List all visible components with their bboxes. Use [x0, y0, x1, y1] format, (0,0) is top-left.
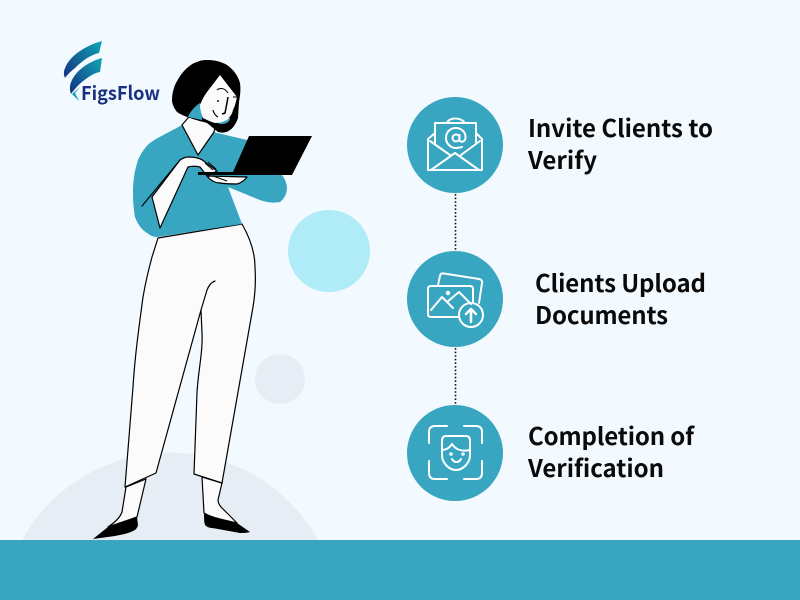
neck — [182, 108, 216, 155]
trousers — [125, 224, 255, 487]
icon: image upload — [428, 273, 483, 327]
right leg and shoe — [202, 477, 250, 533]
illustration: woman with laptop — [93, 60, 312, 539]
step 1 label — [527, 109, 713, 176]
facial features — [213, 88, 237, 117]
connector line 1 — [454, 194, 456, 250]
step 3: completion — [407, 405, 695, 501]
step 3 badge — [407, 405, 503, 501]
hand under laptop — [207, 176, 247, 184]
icon: envelope — [428, 118, 482, 170]
step 2: upload documents — [407, 251, 706, 347]
earring right — [218, 118, 230, 124]
step 1: invite clients — [407, 97, 713, 193]
laptop — [198, 136, 312, 175]
step 2 label: Clients Upload — [535, 264, 706, 299]
fingers — [205, 162, 216, 170]
trouser crease — [201, 281, 215, 310]
left leg and shoe — [93, 479, 146, 539]
blouse — [133, 125, 287, 237]
connector line 2 — [454, 348, 456, 404]
step 2 label: Documents — [535, 296, 668, 331]
step 3 label: Verification — [527, 449, 664, 484]
footer bar — [0, 540, 800, 600]
logo: FigsFlow — [64, 41, 160, 106]
decorative grey circle — [255, 354, 305, 404]
step 3 label — [527, 417, 695, 484]
hair — [172, 60, 240, 133]
ground semicircle — [22, 453, 318, 540]
step 1 badge — [407, 97, 503, 193]
face — [200, 75, 237, 123]
icon: face scan — [429, 426, 482, 479]
logo: FigsFlow: FigsFlow — [81, 79, 160, 106]
sleeve edge line — [142, 160, 180, 206]
step 1 label: Invite Clients to — [528, 109, 713, 144]
step 3 label: Completion of — [528, 417, 695, 452]
decorative cyan circle — [288, 210, 370, 292]
thumb detail — [213, 176, 227, 181]
step 2 badge — [407, 251, 503, 347]
earring left — [188, 103, 202, 120]
step 2 label — [535, 264, 706, 331]
sleeve cuff and arm — [152, 157, 217, 228]
step 1 label: Verify — [527, 141, 597, 176]
